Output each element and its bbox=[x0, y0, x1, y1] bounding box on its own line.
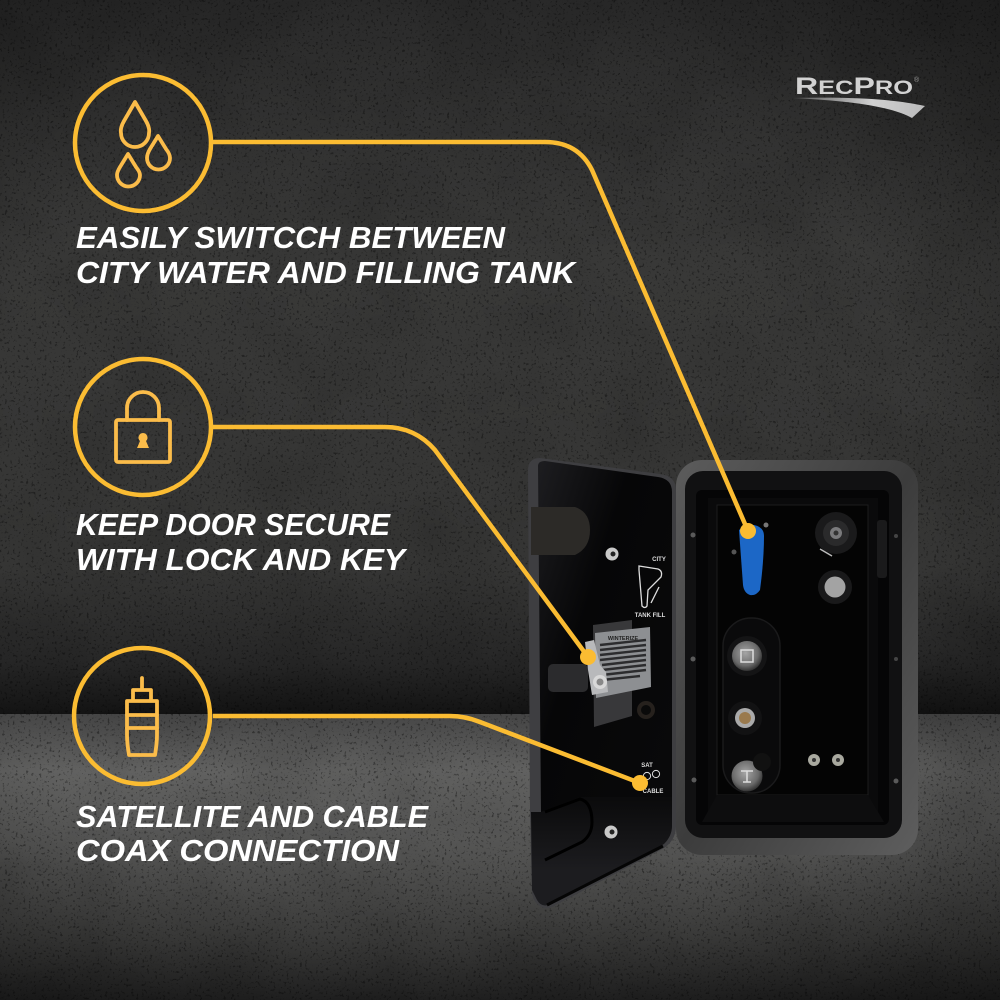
connector line 2 bbox=[213, 427, 588, 657]
dot 1 bbox=[740, 523, 756, 539]
tank fill plug bbox=[818, 570, 852, 604]
heading 2 bbox=[76, 507, 408, 577]
logo: RecPro: ® bbox=[914, 76, 920, 84]
icon: water drops bbox=[75, 75, 211, 211]
heading 2: WITH LOCK AND KEY bbox=[76, 542, 408, 577]
connector line 1 bbox=[213, 142, 748, 531]
label: sat / cable ports bbox=[641, 763, 663, 795]
connector plate bbox=[723, 618, 780, 793]
icon: padlock bbox=[75, 359, 211, 495]
lock cam bbox=[548, 640, 608, 695]
label: winterize sticker bbox=[595, 627, 651, 698]
logo: RecPro: R EC P RO bbox=[795, 73, 913, 100]
callout 2: lock bbox=[75, 359, 596, 665]
callout 3: coax bbox=[74, 648, 648, 868]
heading 1: EASILY SWITCCH BETWEEN bbox=[76, 220, 506, 255]
label: sat / cable ports: CABLE bbox=[643, 789, 663, 795]
heading 1: CITY WATER AND FILLING TANK bbox=[76, 255, 578, 290]
hinge strip bbox=[677, 520, 682, 578]
heading 3: SATELLITE AND CABLE bbox=[76, 799, 429, 834]
logo: RecPro bbox=[793, 73, 925, 118]
heading 3: COAX CONNECTION bbox=[76, 833, 400, 868]
connector: top bbox=[727, 636, 767, 676]
icon: coax connector bbox=[74, 648, 210, 784]
heading 1 bbox=[76, 220, 578, 290]
product: open hatch with door and box bbox=[528, 458, 918, 908]
coax ports bbox=[808, 754, 844, 766]
label: city / tank fill bbox=[635, 557, 666, 619]
dot 2 bbox=[580, 649, 596, 665]
label: sat / cable ports: SAT bbox=[641, 763, 653, 769]
door bbox=[528, 458, 676, 908]
dot 3 bbox=[632, 775, 648, 791]
city water inlet knob bbox=[815, 512, 857, 556]
callout 1: water switch bbox=[75, 75, 756, 539]
heading 3 bbox=[76, 799, 429, 868]
connector: bottom bbox=[732, 753, 771, 792]
box bbox=[676, 460, 918, 855]
label: city / tank fill: CITY bbox=[652, 557, 666, 563]
heading 2: KEEP DOOR SECURE bbox=[76, 507, 391, 542]
label: winterize sticker: WINTERIZE bbox=[608, 636, 638, 642]
blue valve handle bbox=[739, 525, 764, 595]
label: city / tank fill: TANK FILL bbox=[635, 613, 666, 619]
connector: middle bbox=[728, 701, 762, 735]
connector line 3 bbox=[213, 716, 640, 783]
